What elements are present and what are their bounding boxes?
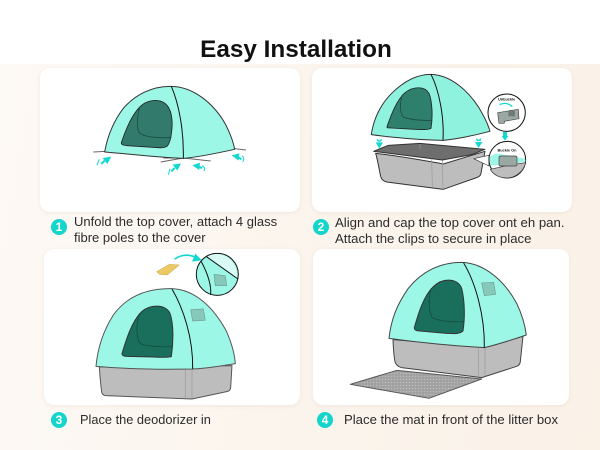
step 2 caption: Align and cap the top cover ont eh pan. xyxy=(335,215,564,230)
panel: step 1 xyxy=(40,68,300,212)
step 2 caption: Attach the clips to secure in place xyxy=(335,231,531,246)
callout: unbuckle xyxy=(488,94,525,131)
panel: step 4 xyxy=(313,249,569,405)
step 1 caption xyxy=(74,214,277,245)
callout: buckle on: Buckle On xyxy=(498,149,517,153)
callout: buckle on xyxy=(489,141,526,178)
step 1 badge: 1 xyxy=(56,220,62,234)
step 1 caption: fibre poles to the cover xyxy=(74,230,206,245)
step 1 badge xyxy=(51,219,67,235)
panel: step 2 xyxy=(312,68,572,212)
callout: detail circle xyxy=(196,253,238,295)
step 4 badge xyxy=(317,412,333,428)
illustration: cover over pan with clips xyxy=(371,74,526,189)
illustration: deodorizer placement xyxy=(96,253,238,399)
step 3 badge: 3 xyxy=(56,413,62,427)
step 1 caption: Unfold the top cover, attach 4 glass xyxy=(74,214,277,229)
step 2 badge: 2 xyxy=(318,220,324,234)
icon: deodorizer pouch on tent xyxy=(191,309,205,321)
step 4 caption: Place the mat in front of the litter box xyxy=(344,412,558,427)
step 2 caption xyxy=(335,215,564,246)
step 3 caption: Place the deodorizer in xyxy=(80,412,211,427)
step 2 badge xyxy=(313,219,329,235)
mat xyxy=(350,370,482,398)
arrows: inward xyxy=(97,153,244,175)
arrows: down xyxy=(376,132,508,149)
step 3 badge xyxy=(51,412,67,428)
step 4 badge: 4 xyxy=(322,413,328,427)
icon: deodorizer block xyxy=(157,264,179,275)
icon: deodorizer pouch xyxy=(482,282,496,296)
title: Easy Installation xyxy=(200,36,392,63)
illustration: unfolded tent with poles xyxy=(93,86,246,175)
arrow: to detail xyxy=(175,255,200,260)
panel: step 3 xyxy=(44,249,300,405)
illustration: litter box with mat xyxy=(350,262,526,398)
callout: unbuckle: Unbuckle xyxy=(498,97,515,101)
